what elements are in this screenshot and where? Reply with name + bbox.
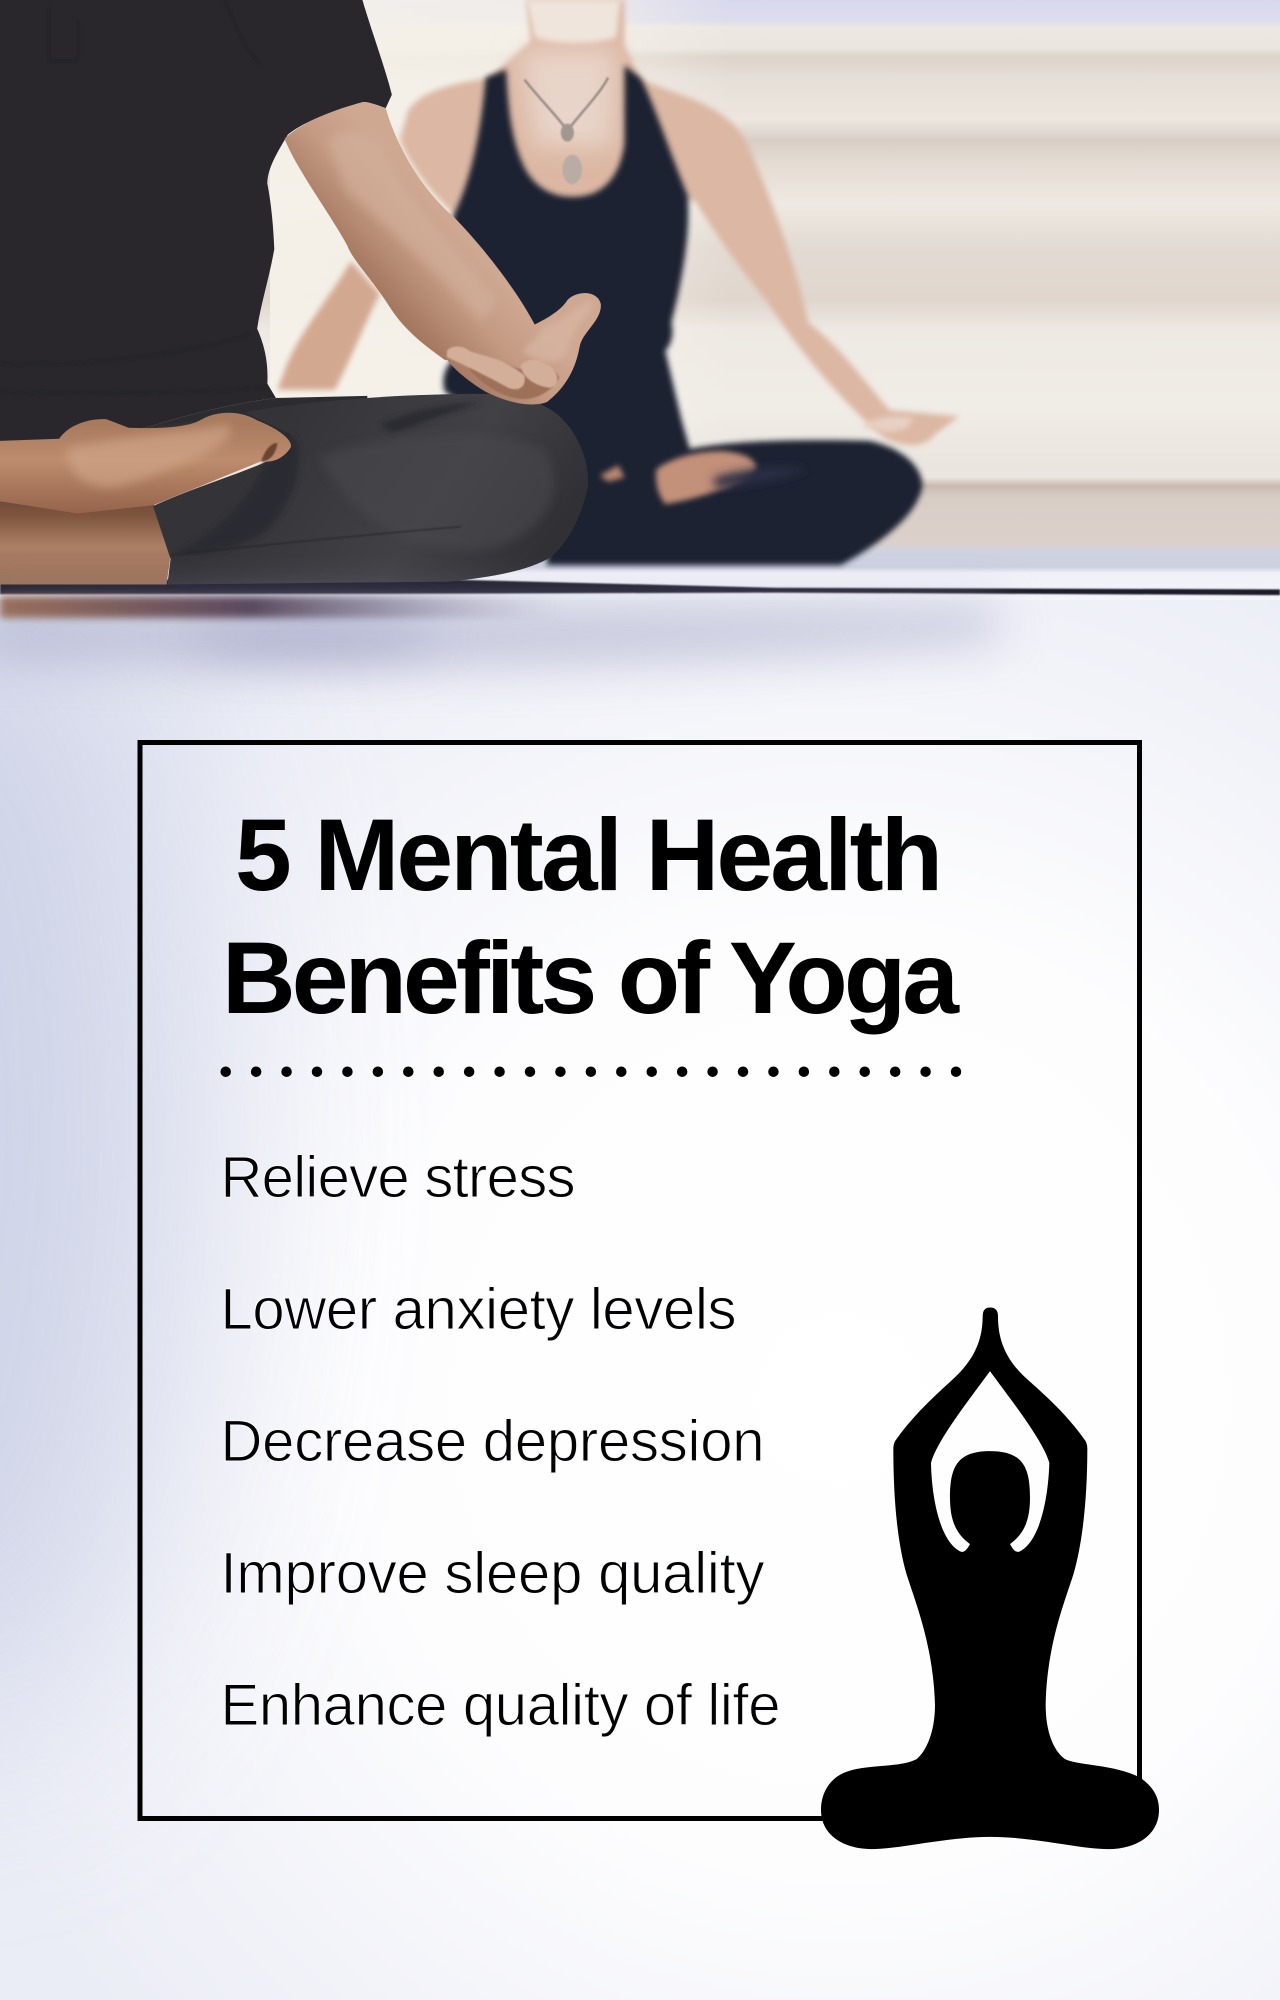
dotted divider (226, 1066, 957, 1077)
floor, mat and shadow (0, 580, 1280, 595)
man: shirt folds and placket (0, 0, 265, 394)
man: lower leg (0, 496, 171, 584)
list of benefits (220, 1145, 780, 1738)
benefit 1: Relieve stress (220, 1145, 576, 1210)
text panel frame (140, 742, 1140, 1818)
benefit 2: Lower anxiety levels (220, 1277, 736, 1342)
photo: two people meditating in a yoga studio (0, 0, 1280, 666)
title: Benefits of Yoga (222, 921, 960, 1035)
man: pants and knee (131, 394, 588, 584)
benefit 3: Decrease depression (220, 1409, 764, 1474)
title (222, 798, 960, 1035)
wooden floor and fading reflection (0, 596, 1000, 666)
man: T-shirt (0, 0, 392, 447)
benefit 4: Improve sleep quality (220, 1541, 764, 1606)
icon: seated yoga silhouette with raised hands (821, 1308, 1159, 1849)
woman in the background (278, 0, 959, 565)
studio wall and window blinds (0, 0, 1280, 600)
man: arm and hand (284, 102, 601, 404)
man: crossed foot (0, 413, 291, 513)
benefit 5: Enhance quality of life (220, 1673, 780, 1738)
title: 5 Mental Health (235, 798, 943, 912)
